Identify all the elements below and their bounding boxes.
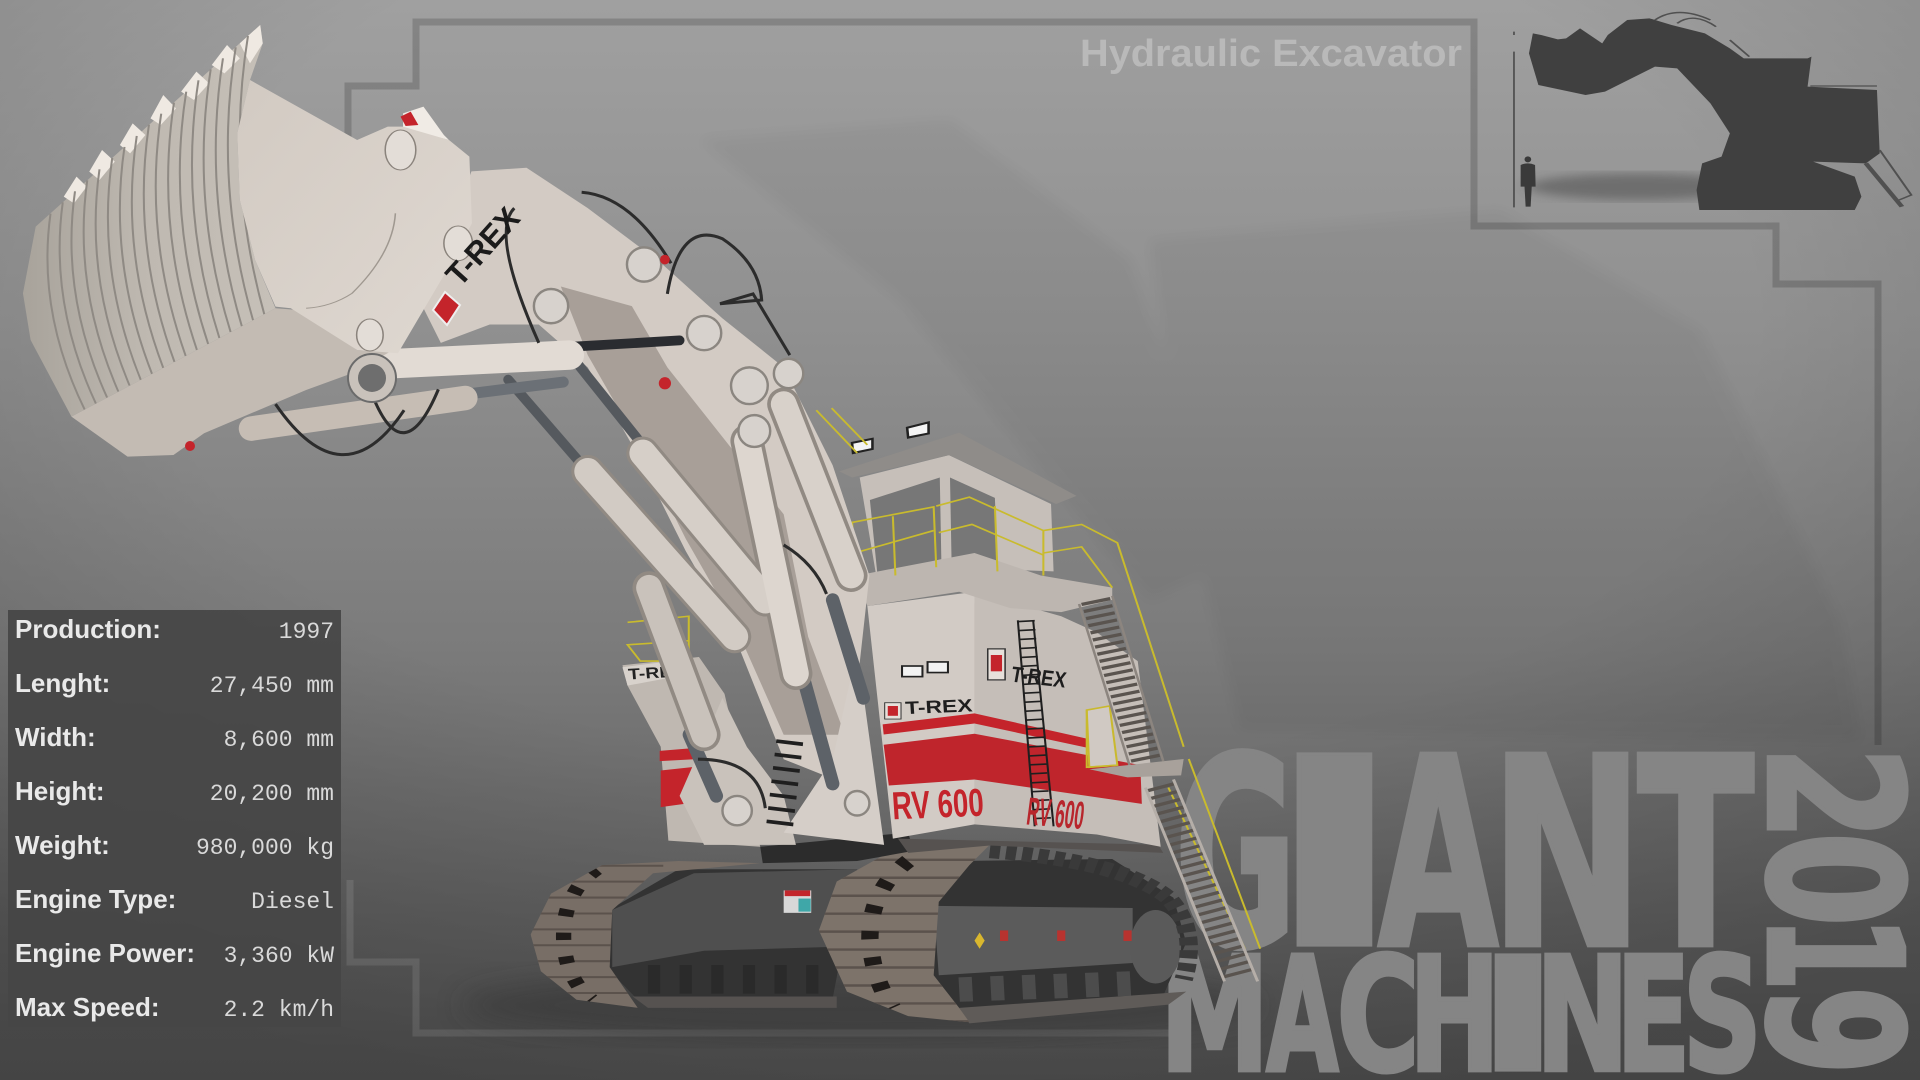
cab (860, 455, 1054, 584)
slew ring (760, 832, 913, 863)
specifications panel (8, 610, 341, 1027)
GIANT: G (1174, 703, 1297, 1008)
ghost excavator backdrop (700, 120, 1860, 740)
hydraulic cylinders (251, 355, 851, 735)
bucket (23, 25, 472, 457)
front track side frame (934, 906, 1133, 975)
warning label (784, 890, 811, 913)
machine silhouette (1529, 18, 1880, 210)
weight row: 980,000 kg (196, 835, 334, 861)
vehicle title: Hydraulic Excavator (1080, 33, 1462, 75)
excavator illustration (23, 25, 1260, 1028)
lower red stripes (884, 734, 1142, 804)
height row: Height: (15, 776, 105, 806)
house logo and T-REX side label: T-REX (1009, 662, 1068, 693)
max speed row: 2.2 km/h (224, 997, 334, 1023)
height ruler (1513, 32, 1515, 207)
bucket link and lug (185, 354, 396, 451)
engine type row (15, 884, 334, 915)
max speed row (15, 992, 334, 1023)
door (1087, 706, 1117, 767)
height row (15, 776, 334, 807)
side ladder (1027, 620, 1043, 826)
front track interior (908, 859, 1186, 1012)
upper red stripes (883, 713, 1087, 748)
GIANT: I (1264, 702, 1405, 1007)
human figure (1521, 156, 1536, 207)
silhouette hoses and stairs (1655, 12, 1911, 207)
engine power row (15, 938, 334, 969)
engine power row: Engine Power: (15, 938, 195, 968)
boom T-REX label: T-REX (438, 200, 527, 293)
front bottom track strip (959, 992, 1186, 1023)
cylinder shading (588, 404, 851, 735)
red hose clips (659, 255, 671, 389)
house side face (974, 592, 1161, 847)
boom underside (561, 287, 845, 735)
house logo and T-REX front label: T-REX (905, 696, 974, 719)
flood lights (852, 422, 929, 453)
A-frame panels (680, 698, 796, 845)
length row: Lenght: (15, 668, 110, 698)
cab windows (870, 478, 997, 575)
cab roof (839, 433, 1077, 504)
width row: Width: (15, 722, 96, 752)
T-REX rear label: T-RE (627, 663, 673, 683)
length row (15, 668, 334, 699)
side plate bolts (357, 130, 472, 351)
giant machines wordmark (1160, 702, 1920, 1080)
bucket side plate (237, 80, 472, 353)
upper stairway (1095, 600, 1147, 763)
rear track interior (602, 869, 857, 1004)
front ladder (779, 741, 790, 833)
GIANT (1174, 702, 1754, 1008)
weight row: Weight: (15, 830, 110, 860)
weight row (15, 830, 334, 861)
house headlights (902, 662, 948, 677)
front track right arc (990, 851, 1189, 979)
underside of house (898, 839, 1163, 853)
undercarriage and house (520, 408, 1260, 1028)
boom body (422, 168, 869, 784)
GIANT: A (1378, 702, 1498, 1007)
house logo and T-REX side label (988, 649, 1068, 693)
GIANT: N (1490, 703, 1644, 1008)
undercarriage and house: RV 600 (1024, 790, 1087, 838)
length row: 27,450 mm (210, 673, 334, 699)
chassis (612, 869, 857, 967)
cylinder rods (465, 340, 863, 796)
front track face (819, 846, 989, 1022)
bucket ribs (47, 36, 264, 410)
rear bottom track strip (633, 996, 837, 1008)
scale silhouette inset (1514, 12, 1911, 210)
walkway deck (857, 553, 1112, 612)
width row: 8,600 mm (224, 727, 334, 753)
idler wheel (1130, 910, 1181, 983)
height row: 20,200 mm (210, 781, 334, 807)
track rollers (959, 983, 1133, 990)
ground shadow (460, 969, 1260, 1041)
yellow rails (628, 408, 1260, 949)
max speed row: Max Speed: (15, 992, 160, 1022)
horn piece (403, 107, 449, 140)
RV 600 front marking: RV 600 (891, 781, 985, 828)
teeth (64, 25, 263, 203)
track markers (1000, 930, 1132, 941)
house front face (867, 592, 974, 839)
boom logo (433, 292, 460, 325)
lower stairway (1161, 786, 1240, 979)
bucket bottom plate (71, 308, 390, 457)
ground shadow (1527, 173, 1749, 200)
engine power row: 3,360 kW (224, 943, 334, 969)
ribbed back shell (23, 25, 276, 417)
boom and cylinders (251, 168, 884, 845)
engine type row: Diesel (251, 889, 334, 915)
rear track face (530, 861, 758, 1008)
year 2019 rotated (1725, 746, 1920, 1075)
GIANT: T (1638, 703, 1754, 1008)
engine type row: Engine Type: (15, 884, 176, 914)
MACHINES (1160, 923, 1762, 1080)
counterweight (622, 657, 760, 847)
boom pins (534, 247, 869, 825)
width row (15, 722, 334, 753)
hoses (276, 192, 827, 808)
production row: Production: (15, 614, 161, 644)
production row: 1997 (279, 619, 334, 645)
production row (15, 614, 334, 645)
decorative frame outline (348, 22, 1878, 1033)
